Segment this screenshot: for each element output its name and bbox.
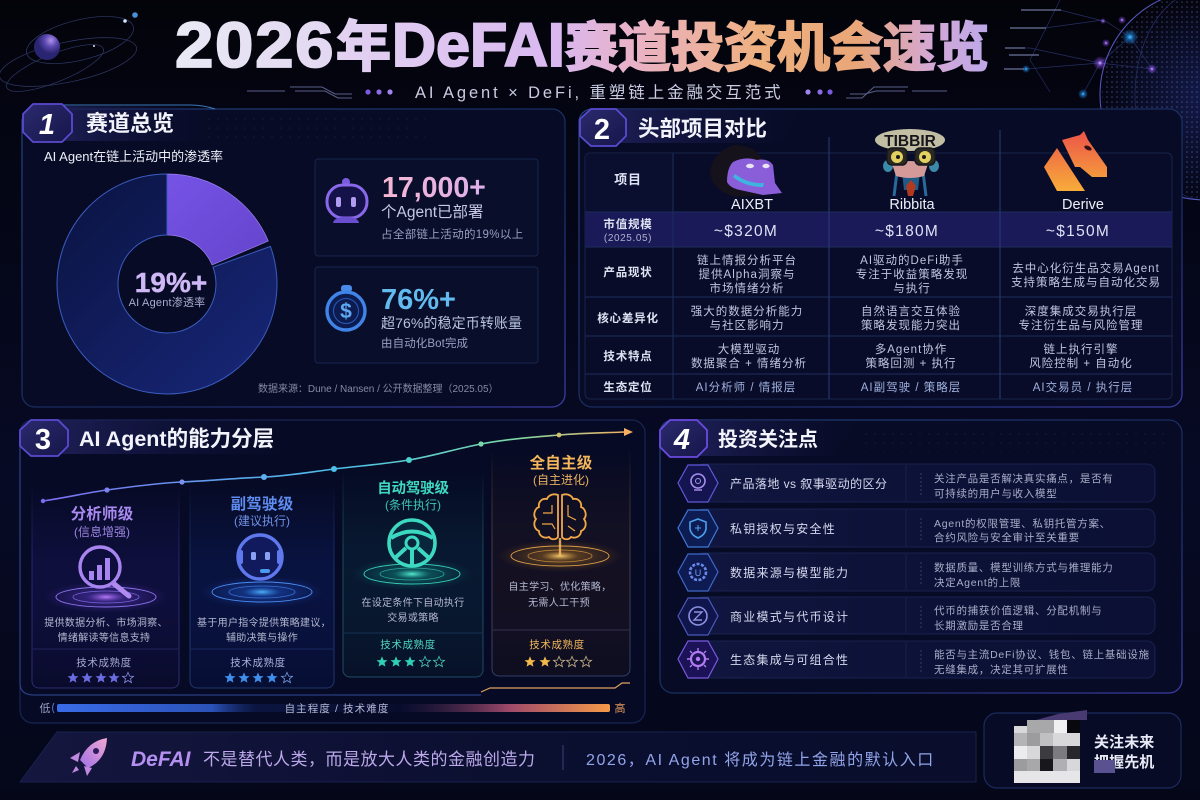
item: keys and security: Agent的权限管理、私钥托管方案、 <box>934 517 1111 530</box>
subtitle decoration left <box>247 87 393 98</box>
panel 2: project comparison <box>579 109 1182 407</box>
icon: stopwatch <box>327 285 365 330</box>
card: analyst tier: 分析师级 <box>71 504 134 523</box>
item: business model and token: 长期激励是否合理 <box>934 619 1024 632</box>
item: keys and security: 私钥授权与安全性 <box>730 521 836 536</box>
card: autopilot tier: 技术成熟度 <box>380 638 436 651</box>
card: fully autonomous tier: 技术成熟度 <box>529 638 585 651</box>
panel 2 header <box>580 109 805 146</box>
row: ecosystem position: AI交易员 / 执行层 <box>1033 380 1133 394</box>
row: tech features <box>603 342 1133 370</box>
stat card: stablecoins <box>315 267 538 363</box>
comparison table <box>585 129 1172 399</box>
icon: token hexagon <box>678 598 718 635</box>
panel 4 header <box>660 420 1170 457</box>
card: autopilot tier <box>343 468 483 677</box>
bottom banner: 不是替代人类，而是放大人类的金融创造力 <box>203 750 536 769</box>
row: product status: 链上情报分析平台 <box>697 253 797 267</box>
item: business model and token <box>678 597 1155 635</box>
row: market cap: (2025.05) <box>604 233 652 244</box>
item: keys and security: 合约风险与安全审计至关重要 <box>934 531 1080 544</box>
row: ecosystem position: 生态定位 <box>603 380 653 394</box>
logo: Ribbita: TIBBIR <box>884 133 936 150</box>
icon: gear hexagon <box>678 554 718 591</box>
row: differentiation: 与社区影响力 <box>710 318 784 332</box>
title: 赛道投资机会速览 <box>565 19 989 78</box>
card: fully autonomous tier: 自主学习、优化策略， <box>508 580 612 593</box>
row: product status <box>603 253 1161 295</box>
row: market cap: ~$150M <box>1046 223 1110 240</box>
card: fully autonomous tier: (自主进化) <box>533 473 589 487</box>
row: ecosystem position: AI分析师 / 情报层 <box>696 380 796 394</box>
title <box>175 10 989 81</box>
rating: 2 stars <box>524 656 592 667</box>
row: tech features: 多Agent协作 <box>875 342 947 356</box>
QR code card <box>984 710 1181 788</box>
row: differentiation: 深度集成交易执行层 <box>1025 304 1137 318</box>
row: project names: Ribbita <box>889 197 936 213</box>
bottom banner: 2026，AI Agent 将成为链上金融的默认入口 <box>586 751 935 769</box>
card: fully autonomous tier: 全自主级 <box>530 453 593 472</box>
row: project names: Derive <box>1062 197 1104 213</box>
row: product status: 去中心化衍生品交易Agent <box>1012 261 1160 275</box>
panel 3: capability tiers <box>20 420 645 723</box>
panel 1 header: 1 <box>39 109 55 141</box>
autonomy scale bar: 自主程度 / 技术难度 <box>285 702 389 715</box>
row: tech features: 大模型驱动 <box>718 342 780 356</box>
card: autopilot tier: 在设定条件下自动执行 <box>362 596 464 609</box>
item: product vs narrative: 关注产品是否解决真实痛点，是否有 <box>934 472 1114 485</box>
panel 4 header: 4 <box>673 424 690 456</box>
title: DeFAI <box>392 11 565 79</box>
item: ecosystem composability <box>678 641 1155 678</box>
trend curve arrow <box>41 428 633 503</box>
stat card: agents: 个Agent已部署 <box>381 203 484 221</box>
QR code card: 把握先机 <box>1094 754 1154 771</box>
card: analyst tier: 情绪解读等信息支持 <box>58 631 150 644</box>
icon: gear hexagon: U <box>695 568 701 578</box>
panel 3 header: 3 <box>35 424 51 456</box>
item: ecosystem composability: 生态集成与可组合性 <box>730 652 849 667</box>
row: differentiation: 自然语言交互体验 <box>861 304 961 318</box>
row: project names: AIXBT <box>731 197 773 213</box>
row: differentiation <box>597 304 1144 332</box>
icon: rocket <box>70 738 107 776</box>
icon: robot <box>327 178 367 223</box>
row: product status: 专注于收益策略发现 <box>856 267 968 281</box>
rating: 4.5 stars <box>68 672 134 683</box>
donut chart <box>57 174 277 394</box>
row: ecosystem position: AI副驾驶 / 策略层 <box>861 380 961 394</box>
card: fully autonomous tier: 无需人工干预 <box>528 597 590 609</box>
card: copilot tier: (建议执行) <box>234 514 290 528</box>
row: product status: 支持策略生成与自动化交易 <box>1011 275 1161 289</box>
row: market cap: ~$180M <box>875 223 939 240</box>
data source note: 数据来源：Dune / Nansen / 公开数据整理（2025.05） <box>258 382 498 395</box>
row: market cap <box>603 217 1110 244</box>
bottom banner <box>20 732 976 782</box>
row: market cap: ~$320M <box>714 223 778 240</box>
item: data and models: 数据来源与模型能力 <box>730 565 849 580</box>
row: differentiation: 策略发现能力突出 <box>861 318 961 332</box>
QR code card: 关注未来 <box>1094 733 1154 751</box>
subtitle: AI Agent × DeFi, 重塑链上金融交互范式 <box>415 83 784 102</box>
panel 4: investment focus <box>660 420 1182 693</box>
card: analyst tier <box>32 484 179 688</box>
row: tech features: 策略回测 + 执行 <box>865 356 957 370</box>
row: tech features: 数据聚合 + 情绪分析 <box>691 356 807 370</box>
row: product status: 提供Alpha洞察与 <box>699 267 795 281</box>
panel 1 header <box>23 104 425 142</box>
card: copilot tier: 技术成熟度 <box>230 656 286 669</box>
row: product status: 与执行 <box>893 281 931 295</box>
icon: magnifier on platform <box>44 547 168 613</box>
card: autopilot tier: 交易或策略 <box>387 611 439 624</box>
illustration: network globe <box>1004 0 1200 200</box>
row: differentiation: 专注衍生品与风险管理 <box>1018 318 1144 332</box>
item: ecosystem composability: 无缝集成，决定其可扩展性 <box>934 663 1069 676</box>
logo: Derive <box>1044 131 1107 191</box>
icon: stopwatch: $ <box>340 300 352 323</box>
icon: steering wheel on platform <box>352 520 472 590</box>
title: 2026 <box>175 10 335 81</box>
panel 3 header <box>20 420 300 456</box>
panel 2 header: 头部项目对比 <box>638 117 767 141</box>
rating: 4 stars <box>224 672 292 683</box>
autonomy scale bar: 高 <box>614 701 626 715</box>
row: product status: 产品现状 <box>603 265 653 279</box>
row: market cap: 市值规模 <box>603 217 653 231</box>
icon: shield hexagon <box>678 510 718 547</box>
donut chart: AI Agent渗透率 <box>129 295 205 309</box>
card: copilot tier <box>190 484 334 688</box>
item: product vs narrative <box>678 464 1155 502</box>
item: data and models: 决定Agent的上限 <box>934 576 1021 589</box>
stat card: agents: 占全部链上活动的19%以上 <box>381 227 524 241</box>
panel 2 header: 2 <box>594 114 610 146</box>
item: keys and security <box>678 509 1155 547</box>
row: tech features: 风险控制 + 自动化 <box>1029 356 1133 370</box>
stat card: agents: 17,000+ <box>382 172 486 204</box>
row: project names: 项目 <box>614 172 642 187</box>
pixelated QR code <box>1014 710 1087 783</box>
card: analyst tier: 提供数据分析、市场洞察、 <box>44 616 168 629</box>
item: product vs narrative: 可持续的用户与收入模型 <box>934 487 1057 500</box>
icon: headset on platform <box>200 535 324 608</box>
card: copilot tier: 基于用户指令提供策略建议， <box>197 616 331 629</box>
row: project names <box>614 129 1107 213</box>
pie subtitle: AI Agent在链上活动中的渗透率 <box>44 149 223 164</box>
panel 1: overview <box>22 104 565 407</box>
stat card: agents <box>315 159 538 256</box>
panel 4 header: 投资关注点 <box>718 428 818 451</box>
icon: brain on platform <box>498 494 622 572</box>
item: ecosystem composability: 能否与主流DeFi协议、钱包、链上基础设施 <box>934 648 1150 661</box>
autonomy scale bar: 低 <box>40 702 50 715</box>
stat card: stablecoins: 76%+ <box>381 284 456 316</box>
bottom banner: DeFAI <box>131 748 192 771</box>
card: copilot tier: 副驾驶级 <box>231 494 294 513</box>
logo: Ribbita <box>875 129 945 196</box>
redaction patch <box>1094 760 1115 773</box>
panel 3 header: AI Agent的能力分层 <box>79 427 274 451</box>
row: product status: 市场情绪分析 <box>710 281 784 295</box>
row: tech features: 技术特点 <box>603 349 653 363</box>
donut chart: 19%+ <box>135 267 207 298</box>
rating: 3 stars <box>376 656 444 667</box>
icon: lightbulb hexagon <box>678 465 718 502</box>
item: business model and token: 代币的捕获价值逻辑、分配机制与 <box>934 604 1102 617</box>
row: tech features: 链上执行引擎 <box>1044 342 1118 356</box>
stat card: stablecoins: 超76%的稳定币转账量 <box>381 315 522 331</box>
card: autopilot tier: (条件执行) <box>385 498 441 512</box>
item: data and models <box>678 553 1155 591</box>
stat card: stablecoins: 由自动化Bot完成 <box>381 336 469 350</box>
logo: AIXBT <box>710 145 782 197</box>
card: analyst tier: (信息增强) <box>74 524 130 539</box>
row: differentiation: 核心差异化 <box>597 311 659 325</box>
autonomy scale bar <box>40 701 626 715</box>
row: differentiation: 强大的数据分析能力 <box>691 304 803 318</box>
card: analyst tier: 技术成熟度 <box>76 656 132 669</box>
card: copilot tier: 辅助决策与操作 <box>226 631 298 644</box>
panel 1 header: 赛道总览 <box>86 111 174 136</box>
item: business model and token: 商业模式与代币设计 <box>730 609 849 624</box>
item: product vs narrative: 产品落地 vs 叙事驱动的区分 <box>730 476 887 491</box>
card: fully autonomous tier <box>492 448 630 676</box>
row: product status: AI驱动的DeFi助手 <box>860 253 964 267</box>
title: 年 <box>336 16 391 78</box>
icon: network hexagon <box>678 641 718 678</box>
subtitle decoration right <box>805 87 947 98</box>
illustration: planet and orbits <box>0 7 141 100</box>
item: data and models: 数据质量、模型训练方式与推理能力 <box>934 561 1114 574</box>
row: ecosystem position <box>603 380 1133 394</box>
card: autopilot tier: 自动驾驶级 <box>377 479 449 497</box>
